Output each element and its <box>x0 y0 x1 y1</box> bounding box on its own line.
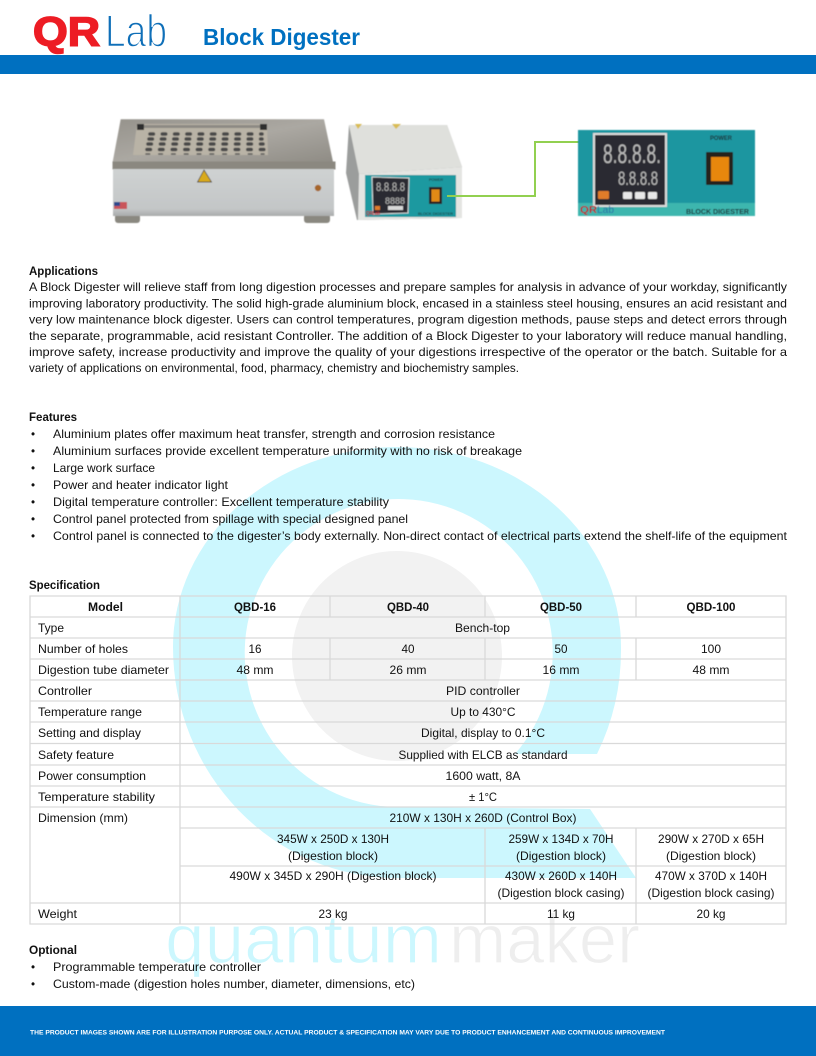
photo: controller close-up <box>578 130 755 216</box>
table row labels: Temperature stability <box>38 791 155 804</box>
list: features: • <box>31 496 35 509</box>
list: features: • <box>31 513 35 526</box>
text block: applications body: the separate, programmable, acid resistant Controller. The addition of a Block Digester to your laboratory will reduce manual handling, <box>29 330 787 343</box>
panel: applications <box>29 265 788 375</box>
table values: 23 kg <box>318 908 348 921</box>
footer <box>0 1006 816 1056</box>
photo: controller close-up: POWER <box>710 135 732 142</box>
watermark: grey circle <box>292 551 502 761</box>
table header row: Model <box>88 601 123 614</box>
text block: applications body: improve safety, increase productivity and improve the quality of your digestions irrespective of the operator or the batch. Suitable for a <box>29 346 788 359</box>
list: optional: • <box>31 978 35 991</box>
photo: control box: 8.8.8.8 <box>376 180 405 194</box>
table row labels: Dimension (mm) <box>38 812 128 825</box>
photo: control box: BLOCK DIGESTER <box>418 211 453 216</box>
table values: PID controller <box>446 685 520 698</box>
footer bar <box>0 1006 816 1056</box>
table values: (Digestion block casing) <box>648 887 775 900</box>
table values: 40 <box>402 643 414 656</box>
table values: ± 1°C <box>469 791 497 804</box>
table row labels: Number of holes <box>38 643 128 656</box>
list: features: • <box>31 530 35 543</box>
watermark: maker word: maker <box>449 900 640 978</box>
panel: specification <box>29 579 786 924</box>
photo: block digester unit <box>112 119 336 223</box>
list: features: • <box>31 445 35 458</box>
table values: Up to 430°C <box>450 706 516 719</box>
table header row <box>88 601 736 614</box>
list: features: Control panel protected from spillage with special designed panel <box>53 513 408 526</box>
table values: 100 <box>701 643 721 656</box>
table values: Bench-top <box>455 622 510 635</box>
watermark: quantum word: quantum <box>165 900 442 978</box>
photo: controller close-up: 8.8.8.8 <box>618 169 658 190</box>
list: optional: • <box>31 961 35 974</box>
list: optional <box>31 961 415 991</box>
photo: controller close-up: Lab <box>597 205 614 216</box>
table values: (Digestion block) <box>666 850 756 863</box>
text block: applications body <box>29 281 788 375</box>
display digits: 8.8.8.8. <box>603 139 661 169</box>
list: features: Aluminium surfaces provide excellent temperature uniformity with no risk of breakage <box>53 445 522 458</box>
table header row: QBD-40 <box>387 601 429 614</box>
photo: control box: QRLab <box>366 211 380 217</box>
logo: QRLab <box>33 6 167 56</box>
list: features: Aluminium plates offer maximum heat transfer, strength and corrosion resistance <box>53 428 495 441</box>
text block: applications body: variety of applications on environmental, food, pharmacy, chemistry and biochemistry samples. <box>29 362 519 375</box>
panel: optional <box>29 944 415 991</box>
table header row: QBD-16 <box>234 601 277 614</box>
heading: optional: Optional <box>29 944 77 957</box>
table values: 20 kg <box>696 908 726 921</box>
table values: 50 <box>554 643 568 656</box>
table values: (Digestion block casing) <box>498 887 625 900</box>
table values: (Digestion block) <box>288 850 378 863</box>
table row labels: Controller <box>38 685 92 698</box>
table values: Supplied with ELCB as standard <box>398 749 568 762</box>
table row labels <box>38 622 169 921</box>
text block: applications body: very low maintenance block digester. Users can control temperatures, program digestion methods, pause steps and detect errors through <box>29 314 787 327</box>
table values: 48 mm <box>692 664 730 677</box>
table values: (Digestion block) <box>516 850 606 863</box>
table values: 430W x 260D x 140H <box>505 870 617 883</box>
title: Block Digester <box>203 24 360 50</box>
table values: 290W x 270D x 65H <box>658 833 764 846</box>
watermark: cyan Q ring <box>173 447 636 878</box>
photo: control box: 8888 <box>385 196 405 206</box>
table values: 345W x 250D x 130H <box>277 833 389 846</box>
list: features: • <box>31 462 35 475</box>
table values: 1600 watt, 8A <box>446 770 521 783</box>
list: optional: Custom-made (digestion holes number, diameter, dimensions, etc) <box>53 978 415 991</box>
table values: 11 kg <box>547 908 575 921</box>
text block: applications body: improving laboratory productivity. The solid high-grade aluminium block, encased in a stainless steel housing, ensures an acid resistant and <box>29 298 787 310</box>
logo: QRLab: QR <box>33 8 100 54</box>
table: specification <box>30 596 786 924</box>
table values: 16 mm <box>542 664 580 677</box>
panel: features <box>29 411 788 543</box>
list: features: Power and heater indicator light <box>53 479 229 492</box>
heading: specification: Specification <box>29 579 100 592</box>
header bar <box>0 55 816 74</box>
list: optional: Programmable temperature controller <box>53 961 261 974</box>
list: features: Large work surface <box>53 462 155 475</box>
table values: 16 <box>248 643 262 656</box>
table row labels: Temperature range <box>38 706 142 719</box>
photo: control box <box>346 124 462 220</box>
table values: 470W x 370D x 140H <box>655 870 767 883</box>
arrow: green connector <box>447 138 586 196</box>
footer disclaimer: THE PRODUCT IMAGES SHOWN ARE FOR ILLUSTRATION PURPOSE ONLY. ACTUAL PRODUCT & SPECIFICATION MAY VARY DUE TO PRODUCT ENHANCEMENT AND CONTINUOUS IMPROVEMENT <box>30 1030 665 1036</box>
watermark: quantummaker logo <box>165 447 640 978</box>
table row labels: Setting and display <box>38 727 141 740</box>
table values: 259W x 134D x 70H <box>508 833 614 846</box>
list: features: • <box>31 428 35 441</box>
photo: controller close-up: QR <box>580 205 598 216</box>
list: features: Control panel is connected to the digester’s body externally. Non-direct contact of electrical parts extend the shelf-life of the equipment <box>53 530 788 543</box>
photo: control box: POWER <box>429 177 443 182</box>
table values: 490W x 345D x 290H (Digestion block) <box>230 870 437 883</box>
table row labels: Power consumption <box>38 770 146 783</box>
logo: QRLab: Lab <box>105 6 167 56</box>
table values <box>230 622 775 921</box>
photo: controller close-up: BLOCK DIGESTER <box>686 209 749 216</box>
text block: applications body: A Block Digester will relieve staff from long digestion processes and prepare samples for analysis in advance of your workday, significantly <box>29 281 787 294</box>
table values: 210W x 130H x 260D (Control Box) <box>390 812 577 825</box>
table values: 26 mm <box>390 664 426 677</box>
table values: 48 mm <box>236 664 274 677</box>
header <box>0 6 816 74</box>
list: features: • <box>31 479 35 492</box>
list: features <box>31 428 788 543</box>
table header row: QBD-100 <box>686 601 736 614</box>
table values: Digital, display to 0.1°C <box>421 727 545 740</box>
heading: features: Features <box>29 411 77 424</box>
heading: applications: Applications <box>29 265 98 278</box>
table row labels: Type <box>38 622 64 635</box>
product photos <box>112 119 755 223</box>
table row labels: Digestion tube diameter <box>38 664 169 677</box>
list: features: Digital temperature controller: Excellent temperature stability <box>53 496 389 509</box>
table row labels: Weight <box>38 908 78 921</box>
table row labels: Safety feature <box>38 749 114 762</box>
table header row: QBD-50 <box>540 601 582 614</box>
